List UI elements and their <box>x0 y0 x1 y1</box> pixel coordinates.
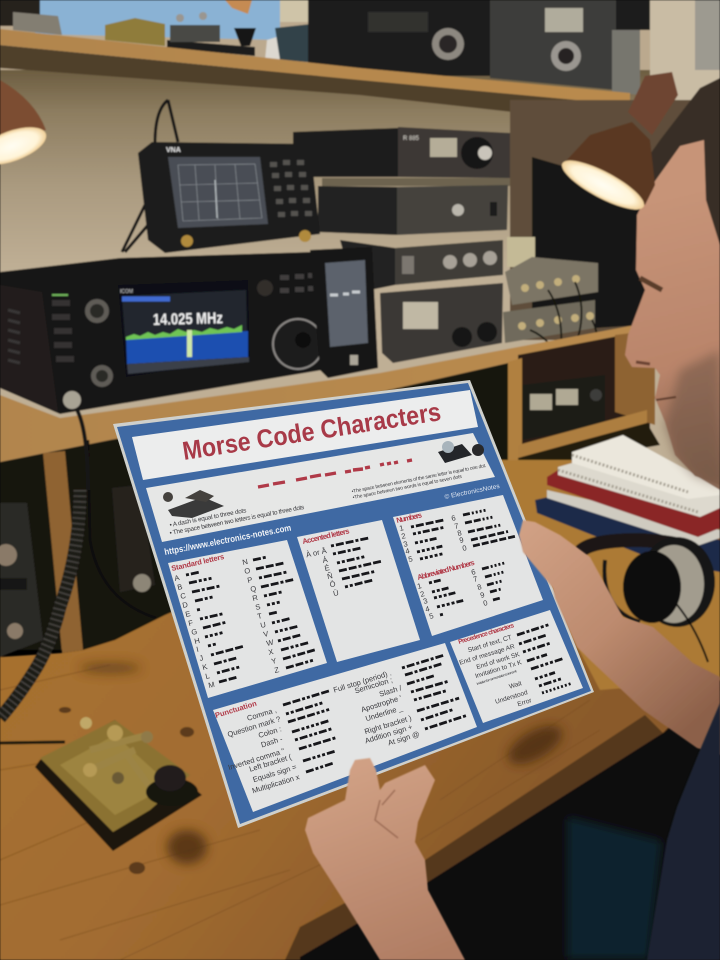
navy book <box>535 497 720 572</box>
letters A to M: D <box>181 600 189 610</box>
small note: Invitation for named station to transmit <box>476 669 517 686</box>
panel: numbers: 8 <box>476 582 483 592</box>
panel: numbers: 4 <box>424 604 431 614</box>
letters N to Z: Y <box>270 656 277 666</box>
top notebook <box>572 435 720 499</box>
panel: numbers: Abbreviated Numbers <box>416 558 476 582</box>
man's neck <box>690 400 720 490</box>
wood posts right <box>508 358 522 487</box>
VNA keypad <box>270 160 312 217</box>
letters N to Z: W <box>265 637 275 648</box>
punctuation labels right: At sign @ <box>387 729 421 747</box>
equipment stack: R 885 <box>403 136 420 142</box>
punctuation labels right: Right bracket ) <box>363 713 413 736</box>
punctuation labels left: Equals sign = <box>252 762 298 784</box>
transceiver body <box>0 252 322 414</box>
intro bullets left: • A dash is equal to three dots <box>169 507 247 529</box>
letters A to M: B <box>176 582 183 592</box>
meter unit <box>522 375 605 440</box>
panel: standard letters: Standard letters <box>170 552 225 573</box>
punctuation labels left: Inverted comma " <box>227 746 286 772</box>
morse code strip <box>258 460 412 487</box>
desk <box>0 470 720 960</box>
spiral notebook 3 <box>547 490 720 546</box>
letters A to M: K <box>201 662 208 672</box>
dark shirt <box>647 703 720 960</box>
thin black cable <box>0 742 65 743</box>
telegraph key image left <box>163 490 224 518</box>
poster: Morse Code Characters <box>113 380 594 828</box>
letters A to M: A <box>173 573 180 583</box>
tall dark cabinet <box>532 157 645 332</box>
punctuation labels left: Left bracket ( <box>248 752 293 774</box>
upper right wall <box>650 0 720 110</box>
punctuation labels right: Apostrophe ' <box>360 693 403 714</box>
poster blue background <box>117 383 591 824</box>
letters N to Z: R <box>251 593 259 603</box>
panel: numbers: 1 <box>416 581 423 591</box>
headphones <box>580 537 715 662</box>
spectrum <box>126 331 248 364</box>
coiled microphone cable <box>0 402 88 718</box>
letters N to Z: T <box>256 611 263 621</box>
letters N to Z: O <box>243 566 251 576</box>
title: Morse Code Characters <box>180 396 443 466</box>
handheld radio <box>310 247 378 378</box>
back wall <box>0 0 720 480</box>
punctuation labels left: Comma , <box>246 705 278 723</box>
desk stains <box>80 663 568 864</box>
letters A to M: H <box>193 636 201 646</box>
panel: accented letters: Ñ <box>326 571 333 581</box>
panel: punctuation: Punctuation <box>214 699 258 720</box>
left lower cubby <box>0 361 517 650</box>
punctuation morse right <box>402 655 466 729</box>
man's face <box>625 130 720 485</box>
box 1 <box>293 128 398 177</box>
letters N to Z: X <box>267 647 274 657</box>
panel: precedence characters: Precedence characters <box>458 622 515 646</box>
panel: precedence characters <box>450 610 583 723</box>
punctuation labels right: Slash / <box>378 683 403 699</box>
panel: numbers: 0 <box>482 598 489 608</box>
jeans <box>566 815 663 960</box>
icom logo: ICOM <box>120 289 133 295</box>
left equipment <box>0 440 156 657</box>
stubble shadow <box>665 350 720 485</box>
copyright: © ElectronicsNotes <box>444 482 501 501</box>
items on top shelf <box>0 0 650 95</box>
panel: numbers: 7 <box>453 521 460 531</box>
gap strip <box>322 178 510 186</box>
letters A to M: L <box>204 671 211 681</box>
middle shelf <box>0 325 635 462</box>
equipment stack <box>293 127 598 374</box>
punctuation labels left: Multiplication x <box>251 772 301 795</box>
VNA analyser <box>138 142 320 253</box>
panel: numbers: Numbers <box>395 510 423 525</box>
intro bullets right: •The space between two words is equal to seven dots <box>352 474 463 501</box>
panel: precedence characters: End of message AR <box>459 643 516 667</box>
telegraph key image right <box>438 441 484 463</box>
shelf dark under <box>518 423 660 470</box>
letters N to Z: V <box>262 629 269 639</box>
desk right sunlit <box>480 460 720 690</box>
far-left wood post <box>43 451 83 653</box>
panel: numbers: 2 <box>419 589 426 599</box>
letters A to M: C <box>179 591 187 601</box>
punctuation morse left <box>283 691 335 772</box>
panel: precedence characters: Invitation to Tx K <box>474 659 523 680</box>
VNA screen <box>168 157 268 228</box>
right recess wall <box>510 100 720 340</box>
panel: accented letters: À or Å <box>305 546 327 559</box>
morse A to M <box>186 572 243 682</box>
letters N to Z: P <box>246 575 253 585</box>
right lamp <box>556 72 678 218</box>
letters A to M: F <box>187 618 194 628</box>
left lamp <box>0 80 51 172</box>
panel: precedence characters: Error <box>517 697 533 708</box>
punctuation labels right: Underline _ <box>364 703 404 723</box>
lower shelf <box>518 410 647 458</box>
panel: numbers: 3 <box>422 596 429 606</box>
letters A to M: I <box>195 645 199 654</box>
letters A to M: G <box>190 627 198 637</box>
knobs <box>85 299 109 323</box>
VNA label: VNA <box>166 147 181 154</box>
mouth <box>656 397 676 400</box>
panel: numbers: 5 <box>428 611 435 621</box>
poster border <box>113 380 594 828</box>
VNA cables <box>122 100 178 252</box>
panel: precedence characters: Understood <box>494 689 529 706</box>
punctuation labels right: Addition sign + <box>364 722 414 745</box>
desk front lip <box>285 715 663 960</box>
main tuning dial <box>272 318 324 370</box>
letters N to Z: Q <box>249 584 257 594</box>
letters A to M: M <box>207 680 216 690</box>
punctuation labels right <box>332 668 421 747</box>
panel: punctuation <box>213 643 477 812</box>
coax connector <box>63 391 81 409</box>
right hand and forearm <box>519 520 720 755</box>
lower hand holding poster <box>305 758 465 960</box>
panel: numbers: 8 <box>456 528 463 538</box>
panel: accented letters <box>297 520 420 662</box>
letters A to M <box>173 573 216 690</box>
right cubby <box>518 330 650 460</box>
spiral notebook 2 <box>558 455 720 517</box>
intro bullets right: •The space between elements of the same letter is equal to one dot. <box>351 463 487 495</box>
panel: numbers: 0 <box>461 543 468 553</box>
morse N to Z <box>253 557 315 668</box>
panel: numbers: 4 <box>404 546 411 556</box>
meter box <box>380 283 503 363</box>
letters N to Z <box>241 557 280 675</box>
letters N to Z: S <box>254 602 261 612</box>
letters N to Z: Z <box>273 665 280 675</box>
panel: numbers: 9 <box>458 535 465 545</box>
punctuation labels right: Semicolon ; <box>353 675 394 695</box>
man's hair <box>632 78 720 245</box>
side boxes <box>507 237 535 267</box>
under-shelf shadow <box>0 45 630 125</box>
letters N to Z: U <box>259 620 267 630</box>
letters A to M: J <box>198 653 204 663</box>
top wall strip <box>0 0 720 70</box>
panel: standard letters <box>168 540 327 698</box>
panel: numbers: 9 <box>479 590 486 600</box>
panel: accented letters: Ü <box>332 588 339 598</box>
map land <box>225 0 252 14</box>
frequency readout: 14.025 MHz <box>153 310 223 329</box>
punctuation labels left: Dash - <box>260 734 284 749</box>
display <box>118 280 250 377</box>
panel: accented letters: Accented letters <box>301 526 350 546</box>
panel: numbers <box>393 495 543 636</box>
panel: numbers: 6 <box>470 567 477 577</box>
panel: accented letters: Á <box>322 555 328 565</box>
top shelf <box>0 29 630 105</box>
wood knots <box>59 707 194 874</box>
box 2 <box>318 186 397 235</box>
punctuation labels right: Full stop (period) . <box>332 668 393 695</box>
panel: precedence characters: End of work SK <box>476 651 521 671</box>
red book <box>547 470 720 537</box>
panel: accented letters: Ö <box>329 579 337 589</box>
under desk darkness <box>300 690 720 960</box>
intro panel <box>146 433 495 542</box>
panel: numbers: 6 <box>450 513 457 523</box>
punctuation labels left <box>226 705 301 795</box>
punctuation labels left: Question mark ? <box>226 714 282 739</box>
panel: numbers: 3 <box>402 539 409 549</box>
brow <box>640 278 662 290</box>
letters A to M: E <box>184 609 191 619</box>
title panel <box>132 390 478 480</box>
punctuation labels left: Colon : <box>257 724 283 740</box>
letters N to Z: N <box>241 557 249 567</box>
panel: accented letters: É <box>324 563 330 573</box>
notebook stack <box>535 435 720 572</box>
panel: numbers: 2 <box>400 531 407 541</box>
wood grain <box>0 665 600 960</box>
panel: numbers: 1 <box>398 523 405 533</box>
intro bullets left: • The space between two letters is equal to three dots <box>169 504 305 537</box>
nostril <box>636 362 650 364</box>
panel: precedence characters: Wait <box>508 680 523 691</box>
box 3 <box>340 240 395 290</box>
website url: https://www.electronics-notes.com <box>163 523 292 557</box>
panel: precedence characters: Start of text, CT <box>467 634 513 654</box>
brass morse key <box>35 717 202 851</box>
wall map <box>35 0 280 40</box>
panel: numbers: 5 <box>407 554 414 564</box>
panel: numbers: 7 <box>472 574 479 584</box>
ICOM transceiver <box>0 252 324 414</box>
